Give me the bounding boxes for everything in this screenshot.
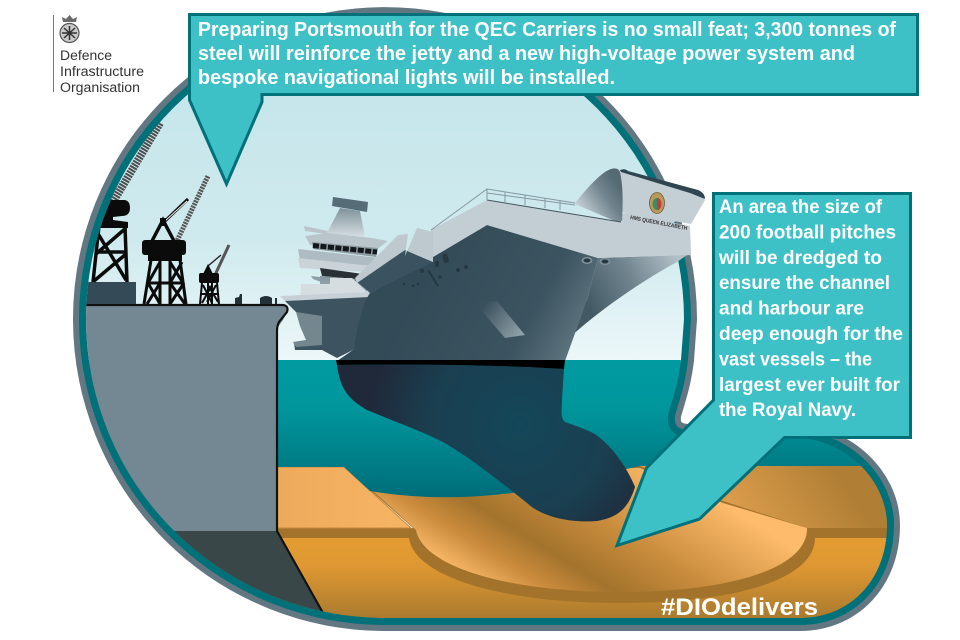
ship name text: HMS QUEEN ELIZABETH xyxy=(630,215,688,232)
quay wall xyxy=(86,305,322,612)
callout: Portsmouth preparation xyxy=(190,14,918,184)
seabed upper right xyxy=(640,466,887,530)
ship stern top strip xyxy=(620,169,705,199)
ship hull panel xyxy=(475,301,525,338)
dredged pocket xyxy=(350,468,807,592)
quay edge line xyxy=(84,305,323,613)
ship bow deck side xyxy=(431,200,487,257)
seabed lower layer xyxy=(277,538,897,622)
ship ski-jump underside xyxy=(355,250,433,293)
ship island mast xyxy=(327,208,365,237)
concrete block xyxy=(84,282,136,304)
ship island decks xyxy=(280,226,388,310)
quay foundation xyxy=(174,531,322,612)
crane: large left xyxy=(93,123,160,282)
ship hull ports xyxy=(403,253,610,287)
crane: small right xyxy=(199,245,229,304)
ship keel below waterline xyxy=(337,365,635,521)
ship: aircraft carrier xyxy=(280,168,705,369)
callout: dredging xyxy=(617,194,910,546)
sky xyxy=(86,94,684,362)
ship flight deck side xyxy=(487,199,691,258)
icon: ship crest xyxy=(650,192,664,214)
ship stern face xyxy=(620,170,705,224)
quay equipment xyxy=(235,294,277,304)
ship railing xyxy=(431,189,575,230)
seabed left shelf xyxy=(277,467,411,528)
sea xyxy=(277,360,895,497)
callout text: dredging: largest ever built for xyxy=(719,374,900,396)
ship lower island sponsons xyxy=(285,297,370,358)
callout text: dredging: and harbour are xyxy=(719,298,864,320)
seabed band xyxy=(277,528,897,538)
logo text: Infrastructure xyxy=(60,64,144,79)
ship deck wedge xyxy=(575,168,623,222)
callout text: Portsmouth preparation xyxy=(198,19,896,89)
callout text: dredging: the Royal Navy. xyxy=(719,399,856,421)
logo text: Organisation xyxy=(60,80,140,95)
callout text: dredging: deep enough for the xyxy=(719,323,903,345)
callout text: dredging: will be dredged to xyxy=(718,247,882,269)
callout text: dredging: An area the size of xyxy=(719,196,882,218)
callout text: dredging: 200 football pitches xyxy=(719,222,896,244)
ship deck edge line xyxy=(487,200,621,222)
icon: crest xyxy=(60,15,79,42)
callout text: dredging xyxy=(718,196,903,421)
ship island radar xyxy=(332,197,368,212)
logo text: Defence xyxy=(60,48,112,63)
callout text: Portsmouth preparation: bespoke navigational lights will be installed. xyxy=(198,67,615,89)
callout text: dredging: vast vessels – the xyxy=(719,348,872,370)
callout text: Portsmouth preparation: Preparing Portsmouth for the QEC Carriers is no small feat; 3,300 tonnes of xyxy=(198,19,896,41)
callout text: dredging: ensure the channel xyxy=(719,272,890,294)
logo text xyxy=(60,48,144,95)
callout text: Portsmouth preparation: steel will reinforce the jetty and a new high-voltage power system and xyxy=(198,43,855,65)
frame: outer rim of cutaway xyxy=(86,20,887,618)
scene: harbour cross-section xyxy=(86,94,887,618)
ship waterline xyxy=(336,360,565,369)
ship hull flank xyxy=(550,255,687,361)
dredged pocket outline xyxy=(344,466,815,603)
ship hull xyxy=(337,225,598,361)
crane: middle xyxy=(142,176,208,304)
ship ski-jump xyxy=(355,228,433,283)
hashtag: #DIOdelivers xyxy=(661,594,818,621)
logo: Defence Infrastructure Organisation xyxy=(53,15,144,95)
